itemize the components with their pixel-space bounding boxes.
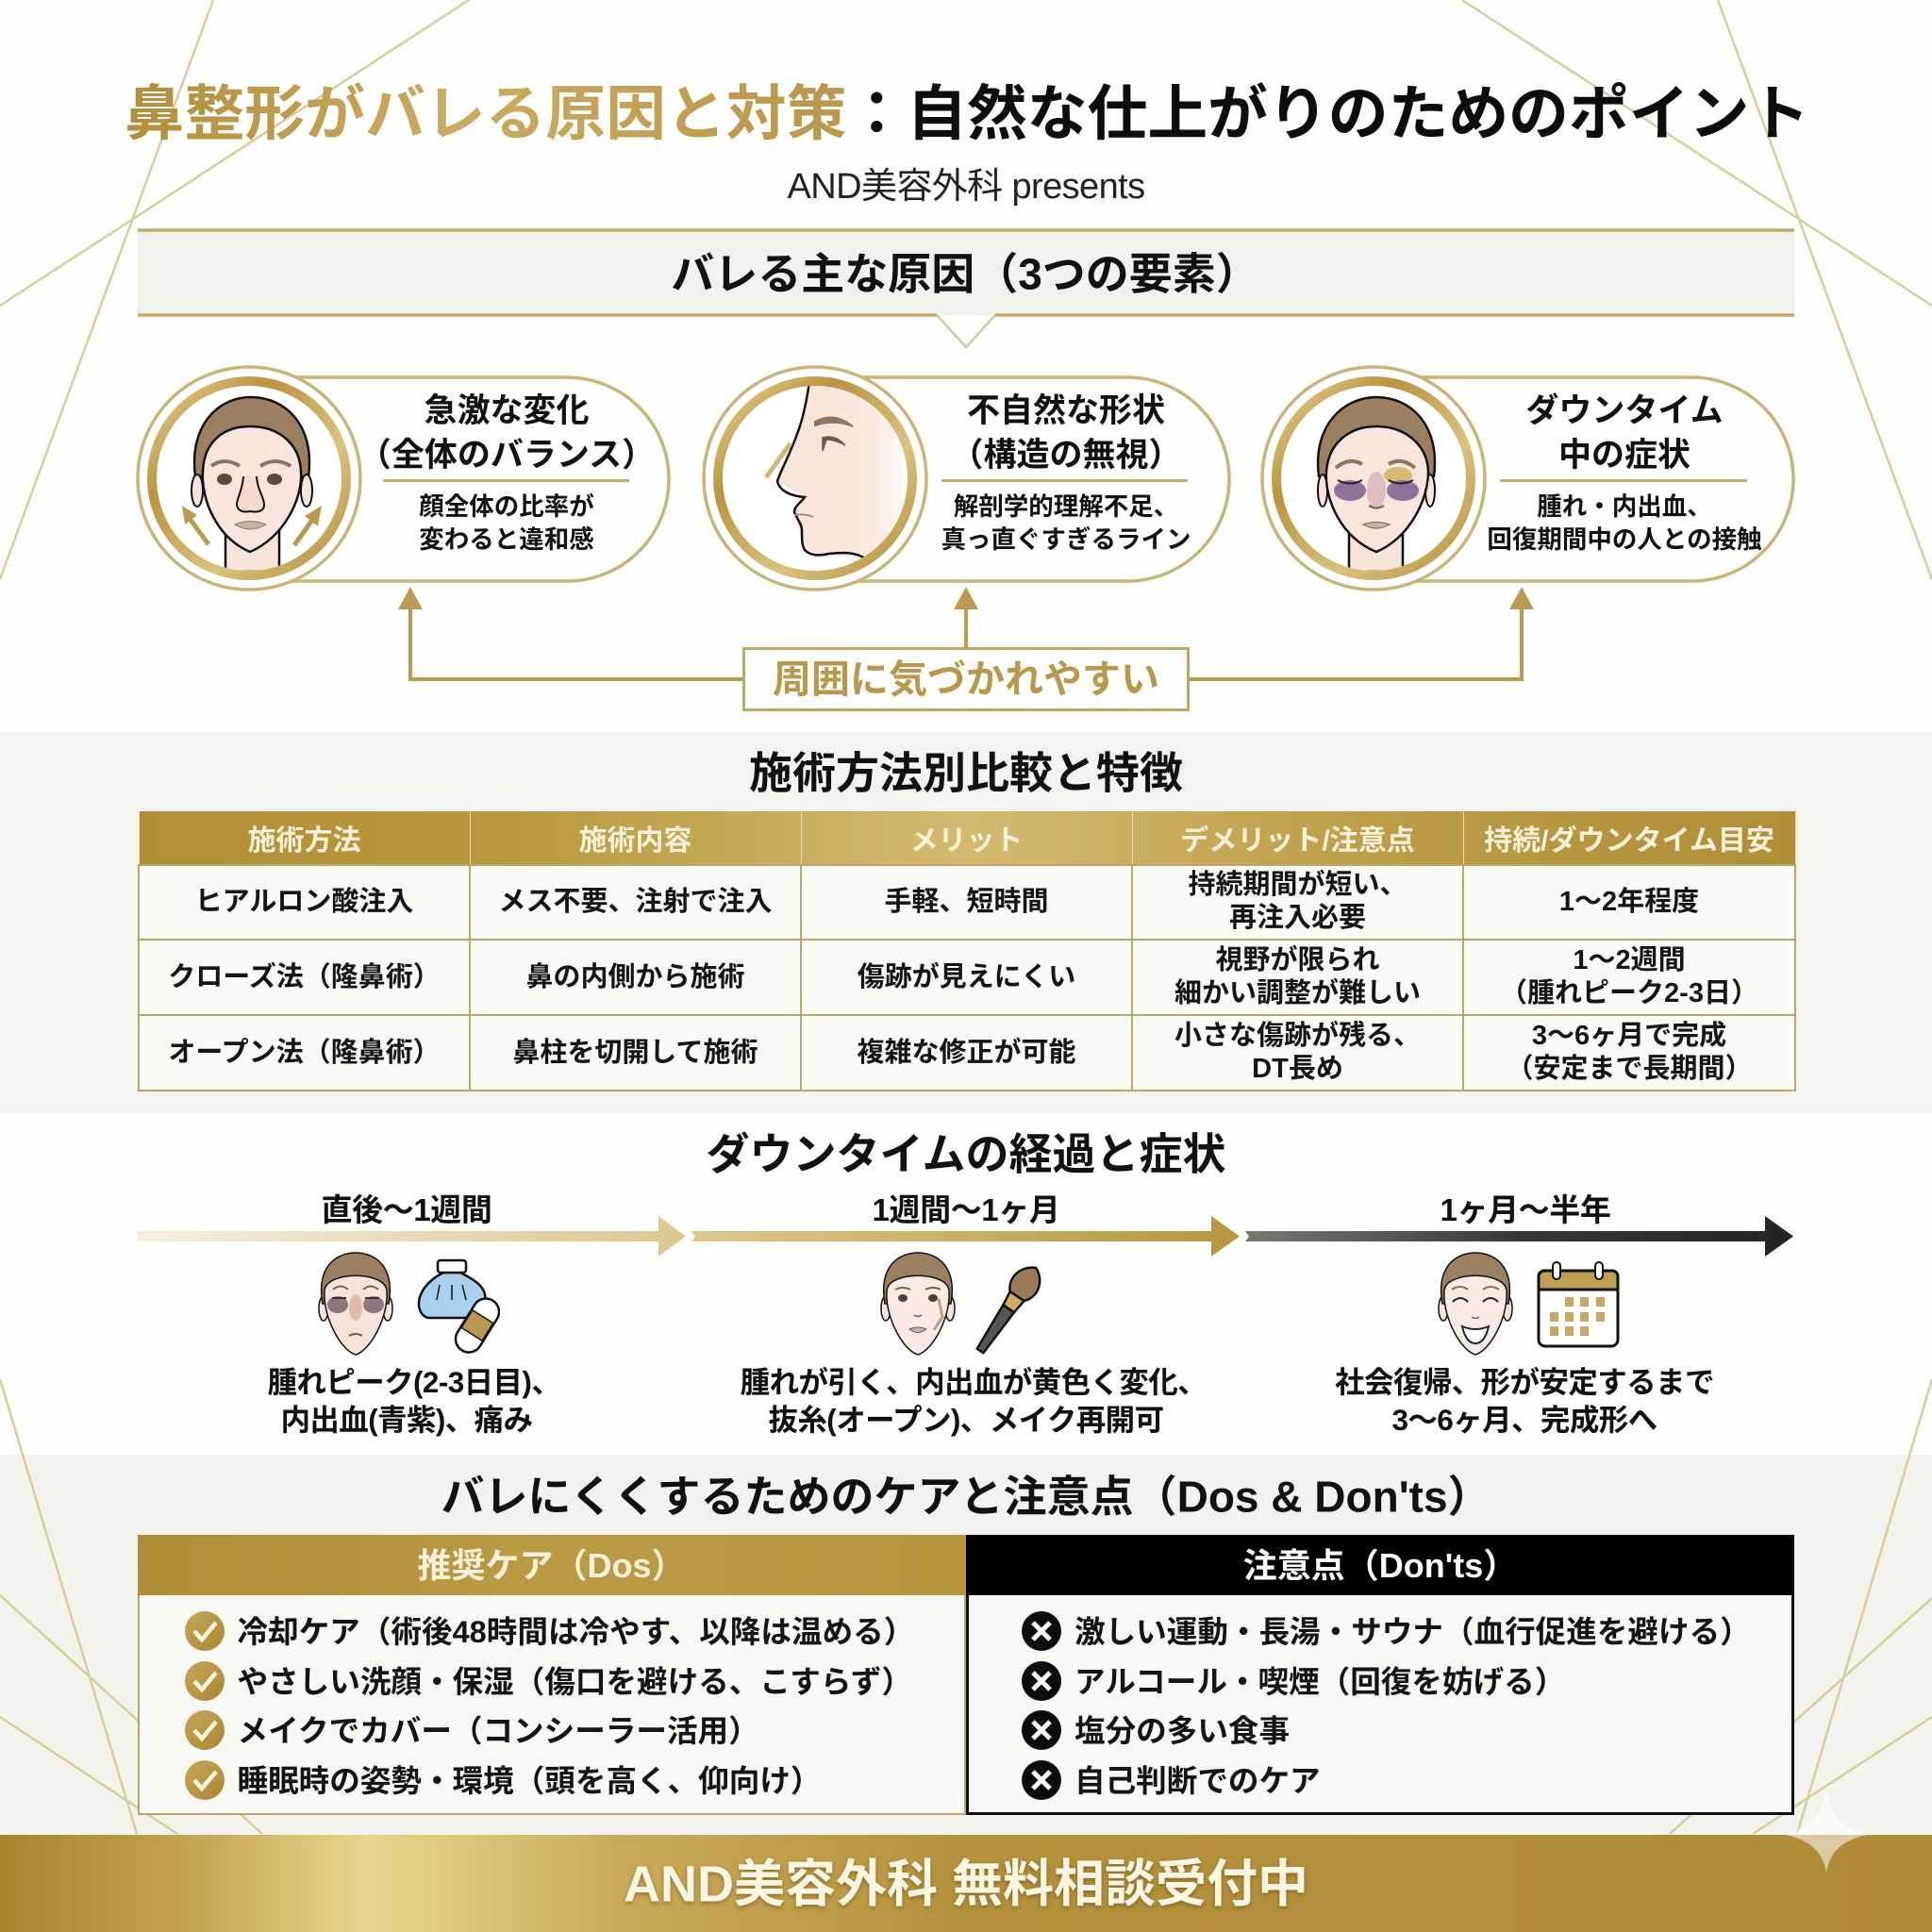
panel: don'ts [966,1535,1794,1815]
heading: downtime progress: ダウンタイムの経過と症状 [706,1129,1226,1178]
stage label 2: 1週間～1ヶ月 [873,1192,1059,1227]
stage 3 description: 3～6ヶ月、完成形へ [1391,1403,1657,1437]
callout: easily noticed by others [742,647,1190,711]
cause 2 description: 真っ直ぐすぎるライン [941,525,1191,554]
cause 2 title: 不自然な形状 [967,392,1165,429]
dos list: 睡眠時の姿勢・環境（頭を高く、仰向け） [238,1762,821,1798]
stage label 1: 直後～1週間 [322,1192,491,1227]
panel: cause 1 sudden change [136,365,671,591]
cause 2 title [950,392,1182,474]
dos list: 冷却ケア（術後48時間は冷やす、以降は温める） [238,1613,914,1649]
comparison table: 3～6ヶ月で完成 [1532,1021,1726,1051]
icon: calendar [1539,1262,1618,1346]
comparison table: 1～2週間 [1573,945,1686,975]
cause 3 description: 回復期間中の人との接触 [1487,525,1762,554]
stage 3 illustration: smiling face and calendar [1438,1252,1619,1356]
icon: swollen face [319,1253,392,1355]
stage 3 description [1335,1365,1714,1437]
panel: dos [138,1535,966,1815]
stage 1 description [268,1365,560,1437]
cause 3 title [1525,392,1724,474]
heading: main causes: バレる主な原因（3つの要素） [671,249,1259,298]
stage 2 description: 抜糸(オープン)、メイク再開可 [769,1403,1163,1437]
cause 3 title: 中の症状 [1558,437,1690,474]
subtitle: AND美容外科 presents [788,167,1144,207]
pill and bruised face illustration [1260,365,1795,591]
comparison table: 複雑な修正が可能 [857,1038,1075,1068]
icon: sparkle [1785,1790,1868,1873]
icon: smiling face [1439,1253,1512,1355]
comparison table: 施術方法 [247,825,360,857]
footer banner [0,1835,1932,1932]
don'ts list [1074,1614,1751,1798]
don'ts list: 激しい運動・長湯・サウナ（血行促進を避ける） [1074,1614,1751,1649]
don'ts list: 自己判断でのケア [1074,1763,1321,1798]
comparison table: 視野が限られ [1215,945,1379,975]
comparison table: 手軽、短時間 [884,887,1049,917]
stage 1 illustration: swollen face, ice bag, bandage [318,1252,500,1356]
cause 2 description: 解剖学的理解不足、 [954,492,1178,521]
don'ts header: 注意点（Don'ts） [1243,1546,1517,1585]
dos header [138,1534,966,1594]
stage 2 description: 腫れが引く、内出血が黄色く変化、 [741,1365,1207,1399]
stage label 3: 1ヶ月～半年 [1441,1192,1610,1227]
cause 3 description [1487,492,1762,554]
comparison table: （腫れピーク2-3日） [1500,978,1758,1008]
comparison table: 細かい調整が難しい [1174,978,1421,1008]
icon: recovering face [881,1253,955,1355]
cause 3 title: ダウンタイム [1525,392,1724,429]
cause 1 description: 顔全体の比率が [419,492,594,521]
icon: bandage [451,1293,504,1357]
cause 2 title: （構造の無視） [950,437,1182,474]
pill and face illustration [136,365,671,591]
comparison table: 鼻の内側から施術 [525,962,745,992]
comparison table: 持続/ダウンタイム目安 [1484,825,1774,857]
dos header: 推奨ケア（Dos） [417,1545,685,1585]
stage 2 description [741,1365,1207,1437]
icon: ice bag [419,1260,485,1318]
title: 鼻整形がバレる原因と対策：自然な仕上がりのためのポイント [125,80,1809,148]
panel: cause 2 unnatural shape [702,365,1231,591]
don'ts list: 塩分の多い食事 [1074,1713,1290,1748]
cause 1 title: （全体のバランス） [358,437,655,474]
cause 1 title [358,392,655,474]
comparison table: 鼻柱を切開して施術 [512,1038,758,1068]
comparison table: 1～2年程度 [1559,887,1699,917]
dos list: メイクでカバー（コンシーラー活用） [238,1713,759,1747]
comparison table: 持続期間が短い、 [1188,870,1407,900]
comparison table [138,811,1796,1091]
comparison table: 再注入必要 [1229,903,1366,933]
cause 3 description: 腫れ・内出血、 [1537,492,1712,521]
comparison table: （安定まで長期間） [1506,1054,1753,1084]
cause 2 description [941,492,1191,554]
stage 1 description: 内出血(青紫)、痛み [281,1403,532,1437]
footer text: AND美容外科 無料相談受付中 [624,1857,1308,1913]
cause 1 title: 急激な変化 [424,392,589,429]
comparison table: クローズ法（隆鼻術） [168,962,441,992]
comparison table: メリット [909,825,1023,857]
background band: method comparison [0,732,1932,1113]
dos list [238,1613,914,1798]
don'ts header [966,1535,1794,1595]
cause 1 description [419,492,594,554]
icon: makeup brush [969,1260,1047,1358]
comparison table: 傷跡が見えにくい [858,962,1075,992]
cause 1 description: 変わると違和感 [419,525,594,554]
comparison table: 施術内容 [579,825,692,857]
arrows: noticed by others [398,587,1534,681]
stage 2 illustration: recovering face and makeup brush [880,1252,1041,1356]
comparison table: DT長め [1252,1054,1343,1084]
timeline arrows [138,1216,1793,1257]
dos check icons [185,1611,225,1800]
heading band: main causes [138,228,1794,349]
callout: easily noticed by others: 周囲に気づかれやすい [773,658,1159,701]
don'ts list: アルコール・喫煙（回復を妨げる） [1074,1664,1565,1699]
heading: method comparison: 施術方法別比較と特徴 [749,748,1183,797]
comparison table: 小さな傷跡が残る、 [1174,1021,1421,1051]
comparison table: デメリット/注意点 [1180,825,1415,857]
comparison table: オープン法（隆鼻術） [168,1038,441,1068]
panel: cause 3 downtime symptoms [1260,365,1795,591]
heading: care dos and don'ts: バレにくくするためのケアと注意点（Dos & Don'ts） [441,1472,1491,1521]
comparison table: メス不要、注射で注入 [498,887,772,917]
comparison table: ヒアルロン酸注入 [195,887,413,917]
don'ts cross icons [1022,1611,1061,1800]
stage 1 description: 腫れピーク(2-3日目)、 [268,1365,560,1399]
pill and profile illustration [702,365,1231,591]
stage 3 description: 社会復帰、形が安定するまで [1335,1365,1714,1399]
background band: care section [0,1455,1932,1835]
dos list: やさしい洗顔・保湿（傷口を避ける、こすらず） [238,1664,912,1698]
